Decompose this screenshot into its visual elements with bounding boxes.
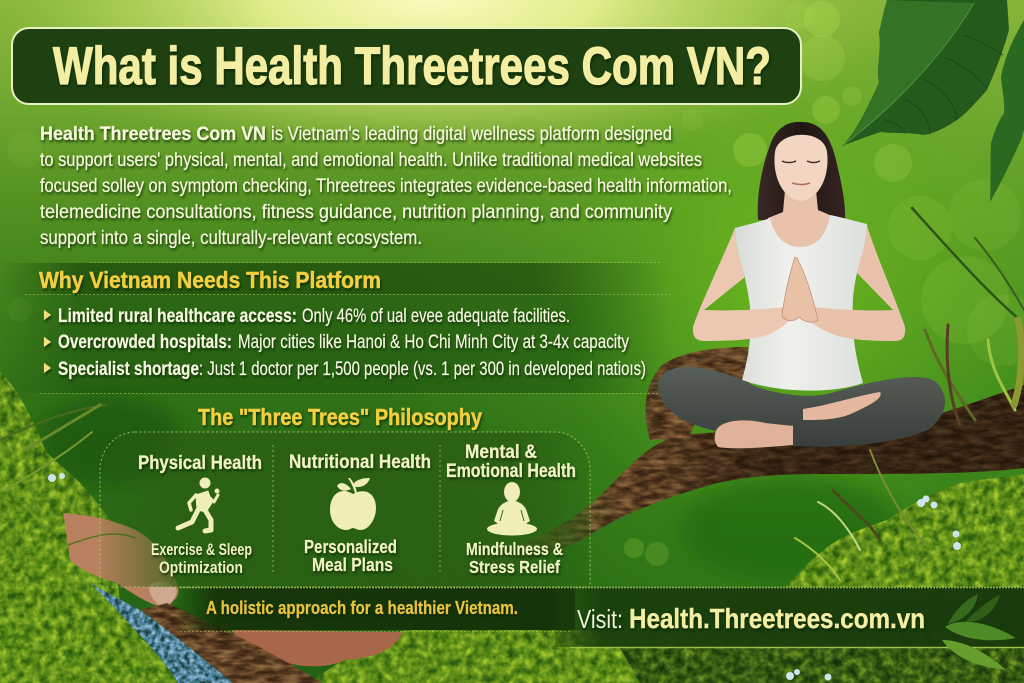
title banner	[12, 28, 801, 104]
intro paragraph: Health Threetrees Com VN	[40, 124, 266, 145]
column: physical health	[138, 453, 262, 577]
bottom-right leaf cluster	[942, 594, 1016, 670]
crossed legs	[658, 367, 945, 447]
branch stump behind the woman	[646, 347, 750, 440]
right arm	[808, 226, 905, 341]
white and blue moss flowers	[48, 473, 961, 680]
left arm	[693, 228, 790, 341]
heading: the three trees philosophy: The "Three Trees" Philosophy	[198, 404, 482, 430]
column: physical health: Physical Health	[138, 453, 262, 474]
tagline: A holistic approach for a healthier Vietnam.	[206, 598, 518, 618]
column: physical health: Exercise & Sleep	[151, 540, 252, 559]
neck and chest	[768, 190, 832, 252]
intro paragraph: telemedicine consultations, fitness guidance, nutrition planning, and community	[40, 202, 672, 223]
column: nutritional health: Meal Plans	[312, 555, 393, 575]
heading: why Vietnam: Why Vietnam Needs This Platform	[39, 267, 381, 293]
grass and moss along the bottom	[310, 630, 1024, 683]
bullet list: Overcrowded hospitals:	[58, 332, 232, 353]
bullet list	[44, 306, 646, 380]
column: mental and emotional health: Emotional Health	[446, 461, 576, 482]
icon: runner	[178, 478, 220, 531]
intro paragraph	[40, 124, 732, 249]
bullet list: : Just 1 doctor per 1,500 people (vs. 1 per 300 in developed natioıs)	[199, 359, 646, 380]
icon: apple	[330, 478, 376, 530]
intro paragraph: to support users' physical, mental, and emotional health. Unlike traditional medical websites	[40, 150, 702, 171]
bullet list: Only 46% of ual evee adequate facilities.	[302, 306, 570, 327]
footer band	[175, 587, 1024, 648]
top-right hanging leaf	[842, 0, 1024, 202]
hair	[758, 122, 845, 220]
panel: three trees philosophy columns	[100, 432, 590, 587]
website link: Visit:	[577, 604, 623, 634]
grass blades	[0, 208, 1024, 580]
thick tree branch under the woman	[503, 385, 1024, 562]
feet	[803, 392, 881, 420]
log and blue stream at lower left	[90, 583, 322, 683]
column: nutritional health: Nutritional Health	[289, 452, 431, 473]
face	[774, 135, 828, 201]
moss on the left	[0, 372, 177, 683]
column: nutritional health: Personalized	[304, 537, 397, 557]
intro paragraph: is Vietnam's leading digital wellness platform designed	[271, 124, 672, 145]
column: physical health: Optimization	[159, 558, 243, 577]
panel: why Vietnam needs this platform	[0, 262, 670, 394]
intro paragraph: support into a single, culturally-relevant ecosystem.	[40, 228, 422, 249]
bullet list: Major cities like Hanoi & Ho Chi Minh City at 3-4x capacity	[238, 332, 629, 353]
shirt	[735, 215, 867, 391]
intro paragraph: focused solley on symptom checking, Threetrees integrates evidence-based health information,	[40, 176, 732, 197]
closed eyes and mouth	[782, 161, 820, 184]
title: What is Health Threetrees Com VN?	[53, 37, 771, 96]
bullet list: Specialist shortage	[58, 359, 199, 380]
column: mental and emotional health: Mental &	[465, 442, 537, 463]
moss on the lower right	[783, 474, 1024, 600]
icon: meditating person	[487, 482, 537, 536]
bullet list: Limited rural healthcare access:	[58, 306, 297, 327]
column: mental and emotional health	[446, 442, 576, 577]
website link: Health.Threetrees.com.vn	[629, 603, 925, 634]
second hanging leaf	[990, 20, 1024, 202]
hand holding a log	[63, 513, 402, 666]
dark foliage under the footer on the right	[620, 648, 1024, 683]
praying hands	[782, 257, 818, 322]
column: mental and emotional health: Mindfulness &	[466, 539, 563, 559]
woman meditating on the branch	[658, 122, 945, 448]
column: mental and emotional health: Stress Relief	[469, 557, 560, 577]
column: nutritional health	[289, 452, 431, 575]
